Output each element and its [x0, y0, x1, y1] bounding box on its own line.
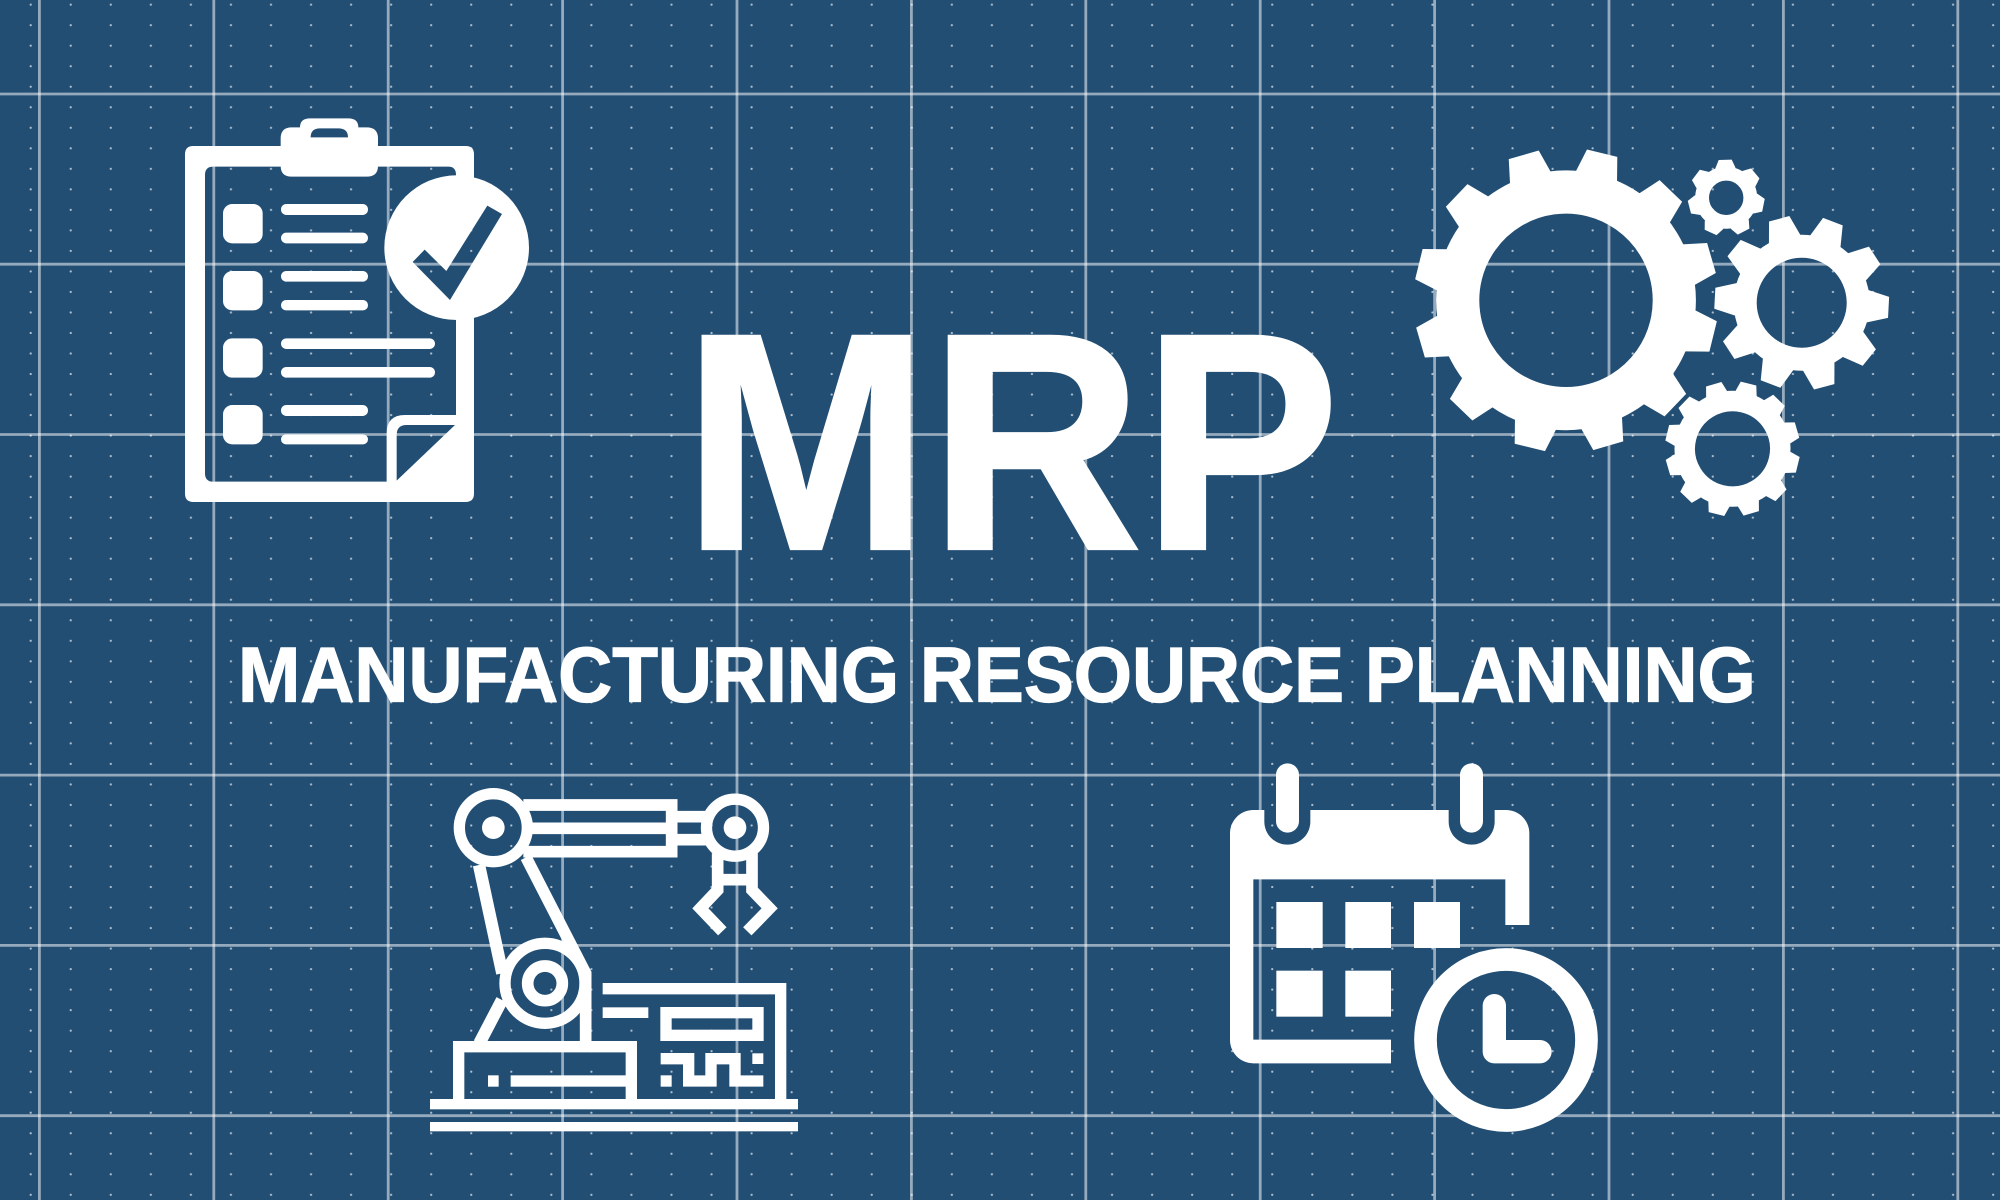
date squares — [1276, 902, 1460, 1017]
clock face — [1425, 959, 1586, 1120]
robot base — [459, 1047, 631, 1100]
checklist row 2 — [223, 271, 368, 310]
calendar binding rings — [1276, 763, 1483, 833]
icon: robot arm — [430, 794, 798, 1131]
title: MRP: MRP — [683, 270, 1340, 615]
small gear — [1686, 159, 1766, 237]
right gear — [1689, 190, 1915, 416]
clock hands — [1494, 1006, 1540, 1052]
floor lines — [430, 1099, 798, 1131]
clipboard clip — [281, 118, 378, 177]
checklist row 4 — [223, 405, 368, 444]
check mark badge — [384, 175, 529, 320]
wrist joint — [706, 799, 763, 856]
large gear — [1383, 117, 1749, 484]
subtitle: manufacturing resource planning: MANUFACTURING RESOURCE PLANNING — [238, 632, 1756, 719]
checklist row 1 — [223, 204, 368, 243]
checklist row 3 — [223, 338, 435, 378]
icon: gears — [1383, 117, 1915, 530]
gripper — [700, 853, 770, 931]
upper arm — [523, 805, 708, 852]
lower joint — [505, 943, 585, 1023]
icon: calendar with clock — [1230, 763, 1586, 1120]
shoulder joint — [459, 794, 527, 862]
calendar body — [1230, 810, 1529, 1063]
icon: clipboard checklist — [185, 118, 529, 502]
lower arm — [479, 857, 586, 1043]
clipboard board with curled corner — [185, 146, 474, 502]
control panel — [603, 989, 781, 1100]
bottom gear — [1651, 368, 1814, 530]
